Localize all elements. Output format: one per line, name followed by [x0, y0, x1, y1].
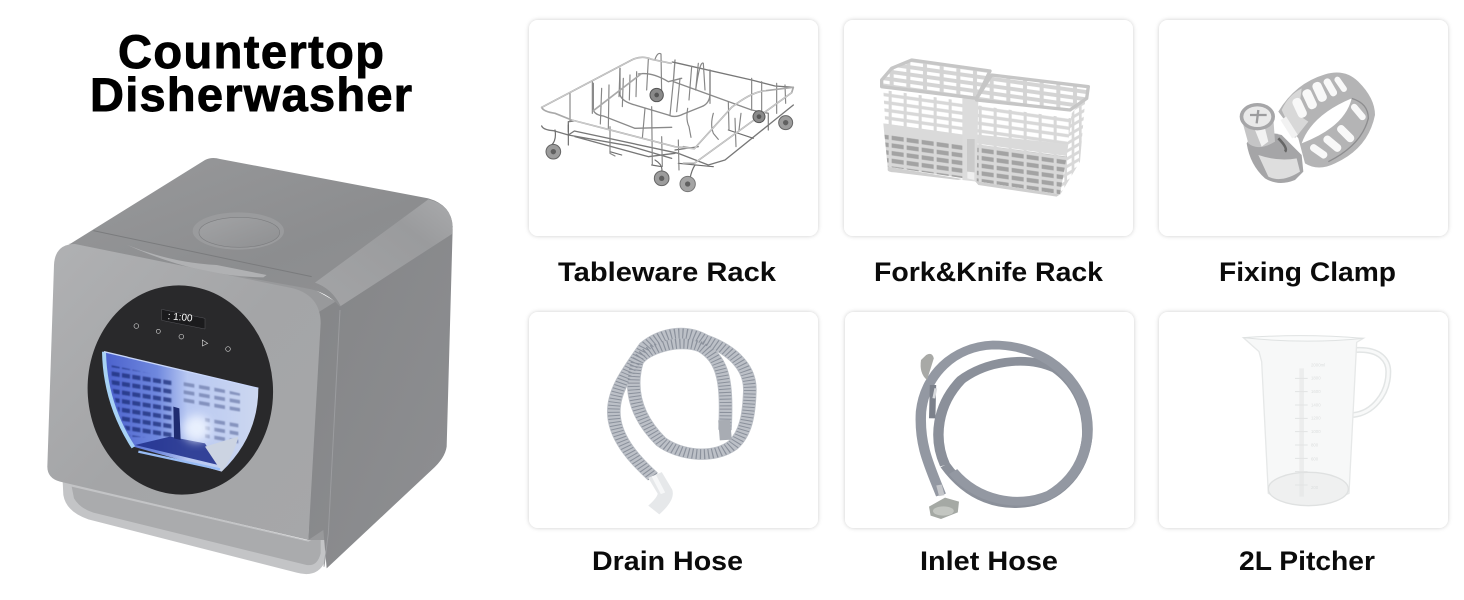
- measuring scale: 2000ml: [1311, 362, 1325, 367]
- label: fixing clamp: Fixing Clamp: [1219, 257, 1396, 287]
- dishwasher illustration: [47, 158, 453, 574]
- door front: [47, 244, 321, 540]
- right side face: [308, 228, 453, 568]
- measuring scale: 1400: [1311, 402, 1321, 407]
- blue window: [104, 352, 258, 472]
- display: [162, 309, 205, 329]
- panel: 2L pitcher: [1159, 312, 1448, 528]
- tray below door: [63, 482, 325, 574]
- measuring scale: 1600: [1311, 389, 1321, 394]
- top front band: [315, 199, 453, 306]
- white elbow: [654, 475, 665, 510]
- label: 2L pitcher: 2L Pitcher: [1239, 546, 1376, 576]
- hose connector end: [724, 420, 726, 440]
- title: [90, 25, 412, 121]
- measuring scale: 800: [1311, 442, 1319, 447]
- basket icon: [882, 60, 1088, 197]
- cabinet hull: [68, 243, 342, 540]
- measuring scale: 1000: [1311, 429, 1321, 434]
- measuring scale: [1295, 362, 1325, 497]
- control icons: [134, 324, 230, 351]
- wire rack icon: [542, 53, 793, 192]
- label: inlet hose: Inlet Hose: [920, 546, 1058, 576]
- label: fork and knife rack: Fork&Knife Rack: [874, 257, 1104, 287]
- inner basin and lower wires: [593, 60, 768, 130]
- panel: inlet hose: [845, 312, 1134, 528]
- label: drain hose: Drain Hose: [592, 546, 743, 576]
- title: Disherwasher: [90, 68, 412, 121]
- measuring scale: 1800: [1311, 376, 1321, 381]
- panel: drain hose: [529, 312, 818, 528]
- plug end: [921, 354, 934, 380]
- circular black panel: [81, 279, 280, 501]
- top face: [68, 158, 453, 307]
- measuring scale: 1200: [1311, 416, 1321, 421]
- wheels: [546, 88, 793, 192]
- knob: [193, 212, 284, 250]
- display: : 1:00: [167, 311, 193, 325]
- label: tableware rack: Tableware Rack: [558, 257, 777, 287]
- smooth hose icon: [921, 345, 1088, 519]
- panel: tableware rack: [529, 20, 818, 236]
- measuring scale: 200: [1311, 485, 1319, 490]
- panel: fork and knife rack: [844, 20, 1133, 236]
- panel: fixing clamp: [1159, 20, 1448, 236]
- pitcher icon: [1243, 336, 1388, 506]
- corrugated hose icon: [614, 333, 750, 510]
- threaded nut: [929, 498, 959, 519]
- title: Countertop: [118, 25, 384, 78]
- clamp icon: [1240, 72, 1375, 183]
- light top rims: [542, 57, 793, 163]
- measuring scale: 600: [1311, 456, 1319, 461]
